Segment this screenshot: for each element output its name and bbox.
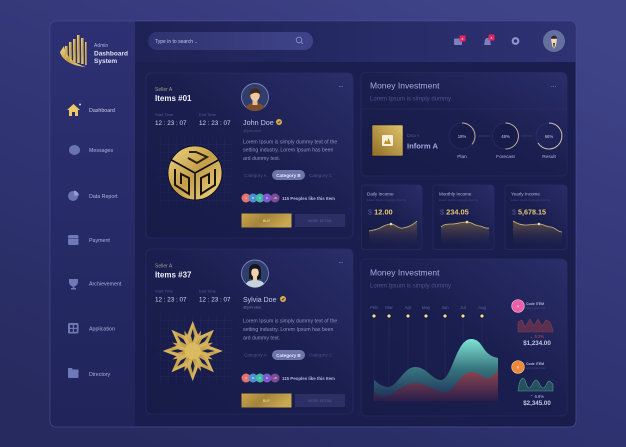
timers: 12 : 23 : 07 <box>155 296 187 304</box>
income value: $ 234.05 <box>440 208 469 216</box>
gauge: forecast: Forecast <box>496 154 515 160</box>
profile name: Sylvia Doe <box>243 297 277 304</box>
nav: messages <box>69 145 113 155</box>
menu dots: ... <box>551 83 556 89</box>
timers: 12 : 23 : 07 <box>199 296 231 304</box>
month labels: Jun <box>441 305 449 310</box>
nav: payment: Payment <box>89 238 110 244</box>
sidebar <box>50 21 135 427</box>
profile name: @johndoe <box>243 128 262 133</box>
category tabs: Category C <box>309 352 333 358</box>
sparkline <box>441 221 489 246</box>
data label: Inform A <box>407 142 438 150</box>
user avatar <box>543 30 565 52</box>
panel: daily income <box>362 185 422 250</box>
panel: monthly income: Monthly Income <box>439 192 472 196</box>
panel heading: Lorem Ipsum is simply dummy <box>370 96 451 102</box>
stat: item a: ⌄ 5.2% <box>530 334 544 339</box>
likes: +8 <box>273 196 277 200</box>
likes: A <box>245 376 247 380</box>
panel heading: Money Investment <box>370 268 440 278</box>
sparkline <box>513 221 562 246</box>
panel heading: Lorem Ipsum is simply dummy <box>370 284 451 290</box>
stat: item b: ⌃ 6.8% <box>530 394 544 399</box>
logo text: System <box>94 58 117 65</box>
stat: item a: Lorem Ipsum text <box>526 307 546 310</box>
likes: C <box>259 376 262 380</box>
menu dots: ... <box>338 259 344 265</box>
category tabs: Category A <box>244 173 268 178</box>
gauge: plan: 18% <box>458 134 466 139</box>
logo text: Admin <box>94 43 108 49</box>
panel: yearly income: Yearly Income <box>511 192 540 196</box>
gauge: result: 66% <box>545 134 553 139</box>
panel: yearly income <box>505 185 567 250</box>
icon: bell <box>484 34 494 45</box>
logo icon <box>60 35 87 67</box>
nav: data report <box>68 190 118 201</box>
nav: application: Application <box>89 326 115 332</box>
nav: directory: Directory <box>89 372 111 378</box>
gold emblem <box>168 146 222 200</box>
dashboard window <box>50 21 576 427</box>
income value: $ 5,678.15 <box>512 208 546 216</box>
category tabs <box>244 170 333 180</box>
profile name: @johndoe <box>243 304 262 310</box>
stat: item a <box>512 300 553 347</box>
panel: monthly income: Lorem Ipsum is simply dummy <box>439 198 479 202</box>
panel: yearly income: Lorem Ipsum is simply dummy <box>511 198 551 202</box>
icon: bell: 8 <box>491 36 493 40</box>
timeline dots <box>372 314 484 318</box>
icon: mail <box>454 36 466 45</box>
stat: item a: Code ITEM <box>526 302 544 306</box>
gauge: forecast <box>492 123 518 160</box>
description: Lorem Ipsum is simply dummy text of the <box>243 140 337 146</box>
nav: archievement <box>69 279 122 290</box>
panel: item 01 <box>146 73 353 238</box>
more detail button <box>295 214 345 227</box>
item heading: Seller A <box>155 264 173 270</box>
timers: 12 : 23 : 07 <box>199 120 231 127</box>
month labels: Jul <box>460 305 466 310</box>
profile name: John Doe <box>243 118 274 127</box>
likes <box>242 374 335 382</box>
nav: archievement: Archievement <box>89 282 122 288</box>
description: setting industry. Lorem Ipsum has been <box>243 327 334 333</box>
more detail button: MORE DETAIL <box>308 219 332 223</box>
category tabs: Category C <box>309 173 333 178</box>
nav: messages: Messages <box>89 148 113 154</box>
likes: B <box>252 196 254 200</box>
stat: item b: Lorem Ipsum text <box>526 367 546 370</box>
panel: money investment summary <box>361 72 567 176</box>
buy button: BUY <box>263 219 271 223</box>
stat: item a: A <box>517 304 520 308</box>
timers <box>155 112 231 127</box>
panel: daily income: Lorem Ipsum is simply dummy <box>367 198 407 202</box>
stat: item a: $1,234.00 <box>523 340 551 347</box>
panel heading: Money Investment <box>370 80 440 90</box>
timers: Start Time <box>155 112 174 117</box>
timers <box>155 288 231 304</box>
panel heading <box>370 268 451 290</box>
month labels: Apr <box>405 305 412 310</box>
panel: item 37 <box>146 249 353 414</box>
description: ard dummy text. <box>243 336 280 342</box>
data label <box>407 133 438 150</box>
panel: daily income: Daily Income <box>367 192 394 196</box>
nav: application <box>68 323 115 334</box>
icon: mail: 8 <box>462 37 464 41</box>
gauge: result <box>536 123 562 160</box>
icon: settings <box>513 38 518 44</box>
nav: payment <box>68 235 110 245</box>
buy button: BUY <box>263 399 271 403</box>
gauge: plan: Plan <box>457 154 467 160</box>
stat: item b: $2,345.00 <box>523 400 551 407</box>
item heading: Items #37 <box>155 270 192 280</box>
logo text: Dashboard <box>94 50 128 58</box>
month labels <box>370 305 486 310</box>
profile name <box>243 296 286 310</box>
nav: dashboard <box>67 104 115 116</box>
more detail button <box>295 394 345 407</box>
description: ard dummy text. <box>243 156 280 162</box>
gauge: forecast: 48% <box>501 134 510 139</box>
panel: monthly income <box>433 185 494 250</box>
gold star emblem <box>163 321 223 381</box>
description: Lorem Ipsum is simply dummy text of the <box>243 318 337 324</box>
likes: A <box>245 196 247 200</box>
description: setting industry. Lorem Ipsum has been <box>243 148 334 154</box>
likes: +8 <box>273 376 277 380</box>
area chart <box>374 339 498 401</box>
description <box>243 140 337 162</box>
sparkline <box>369 221 417 246</box>
data label: Data A <box>407 133 420 138</box>
panel heading <box>370 80 451 102</box>
nav: dashboard: Dashboard <box>89 108 115 114</box>
buy button <box>242 394 292 408</box>
search box: Type in to search .. <box>155 39 197 45</box>
likes: B <box>252 376 254 380</box>
profile avatar <box>242 84 268 111</box>
timeline guides <box>374 316 482 400</box>
item heading <box>155 87 192 103</box>
nav: data report: Data Report <box>89 194 118 200</box>
category tabs: Category A <box>244 352 268 358</box>
item heading: Seller A <box>155 87 173 93</box>
category tabs: Category B <box>276 173 301 178</box>
month labels: Mar <box>385 305 393 310</box>
likes: 115 Peoples like this Item <box>282 376 335 381</box>
stat: item b <box>512 361 553 407</box>
item heading: Items #01 <box>155 94 192 103</box>
likes: 115 Peoples like this Item <box>282 196 335 201</box>
timers: Start Time <box>155 288 174 294</box>
likes <box>242 194 335 202</box>
nav: directory <box>68 368 111 378</box>
likes: D <box>266 376 269 380</box>
month labels: Aug <box>478 305 486 310</box>
stat: item b: B <box>517 364 520 370</box>
income value: $ 12.00 <box>368 208 393 216</box>
likes: D <box>266 196 269 200</box>
category tabs: Category B <box>276 353 301 358</box>
buy button <box>242 214 292 228</box>
logo text <box>94 43 128 65</box>
top bar <box>135 21 576 62</box>
profile name <box>243 118 282 133</box>
menu dots: ... <box>338 83 344 89</box>
panel: money investment chart <box>361 259 567 416</box>
connector lines <box>478 135 533 137</box>
likes: C <box>259 196 262 200</box>
gauge: result: Result <box>542 154 556 160</box>
gauge: plan <box>449 123 475 160</box>
timers: End Time <box>199 112 217 117</box>
more detail button: MORE DETAIL <box>308 399 332 403</box>
timers: 12 : 23 : 07 <box>155 120 187 127</box>
category tabs <box>244 350 333 360</box>
month labels: Feb <box>370 305 378 310</box>
month labels: May <box>422 305 431 310</box>
search box <box>148 32 313 50</box>
description <box>243 318 337 342</box>
profile avatar <box>242 260 268 288</box>
item heading <box>155 264 192 280</box>
gold data tile <box>372 125 403 156</box>
timers: End Time <box>199 288 217 294</box>
stat: item b: Code ITEM <box>526 362 544 366</box>
